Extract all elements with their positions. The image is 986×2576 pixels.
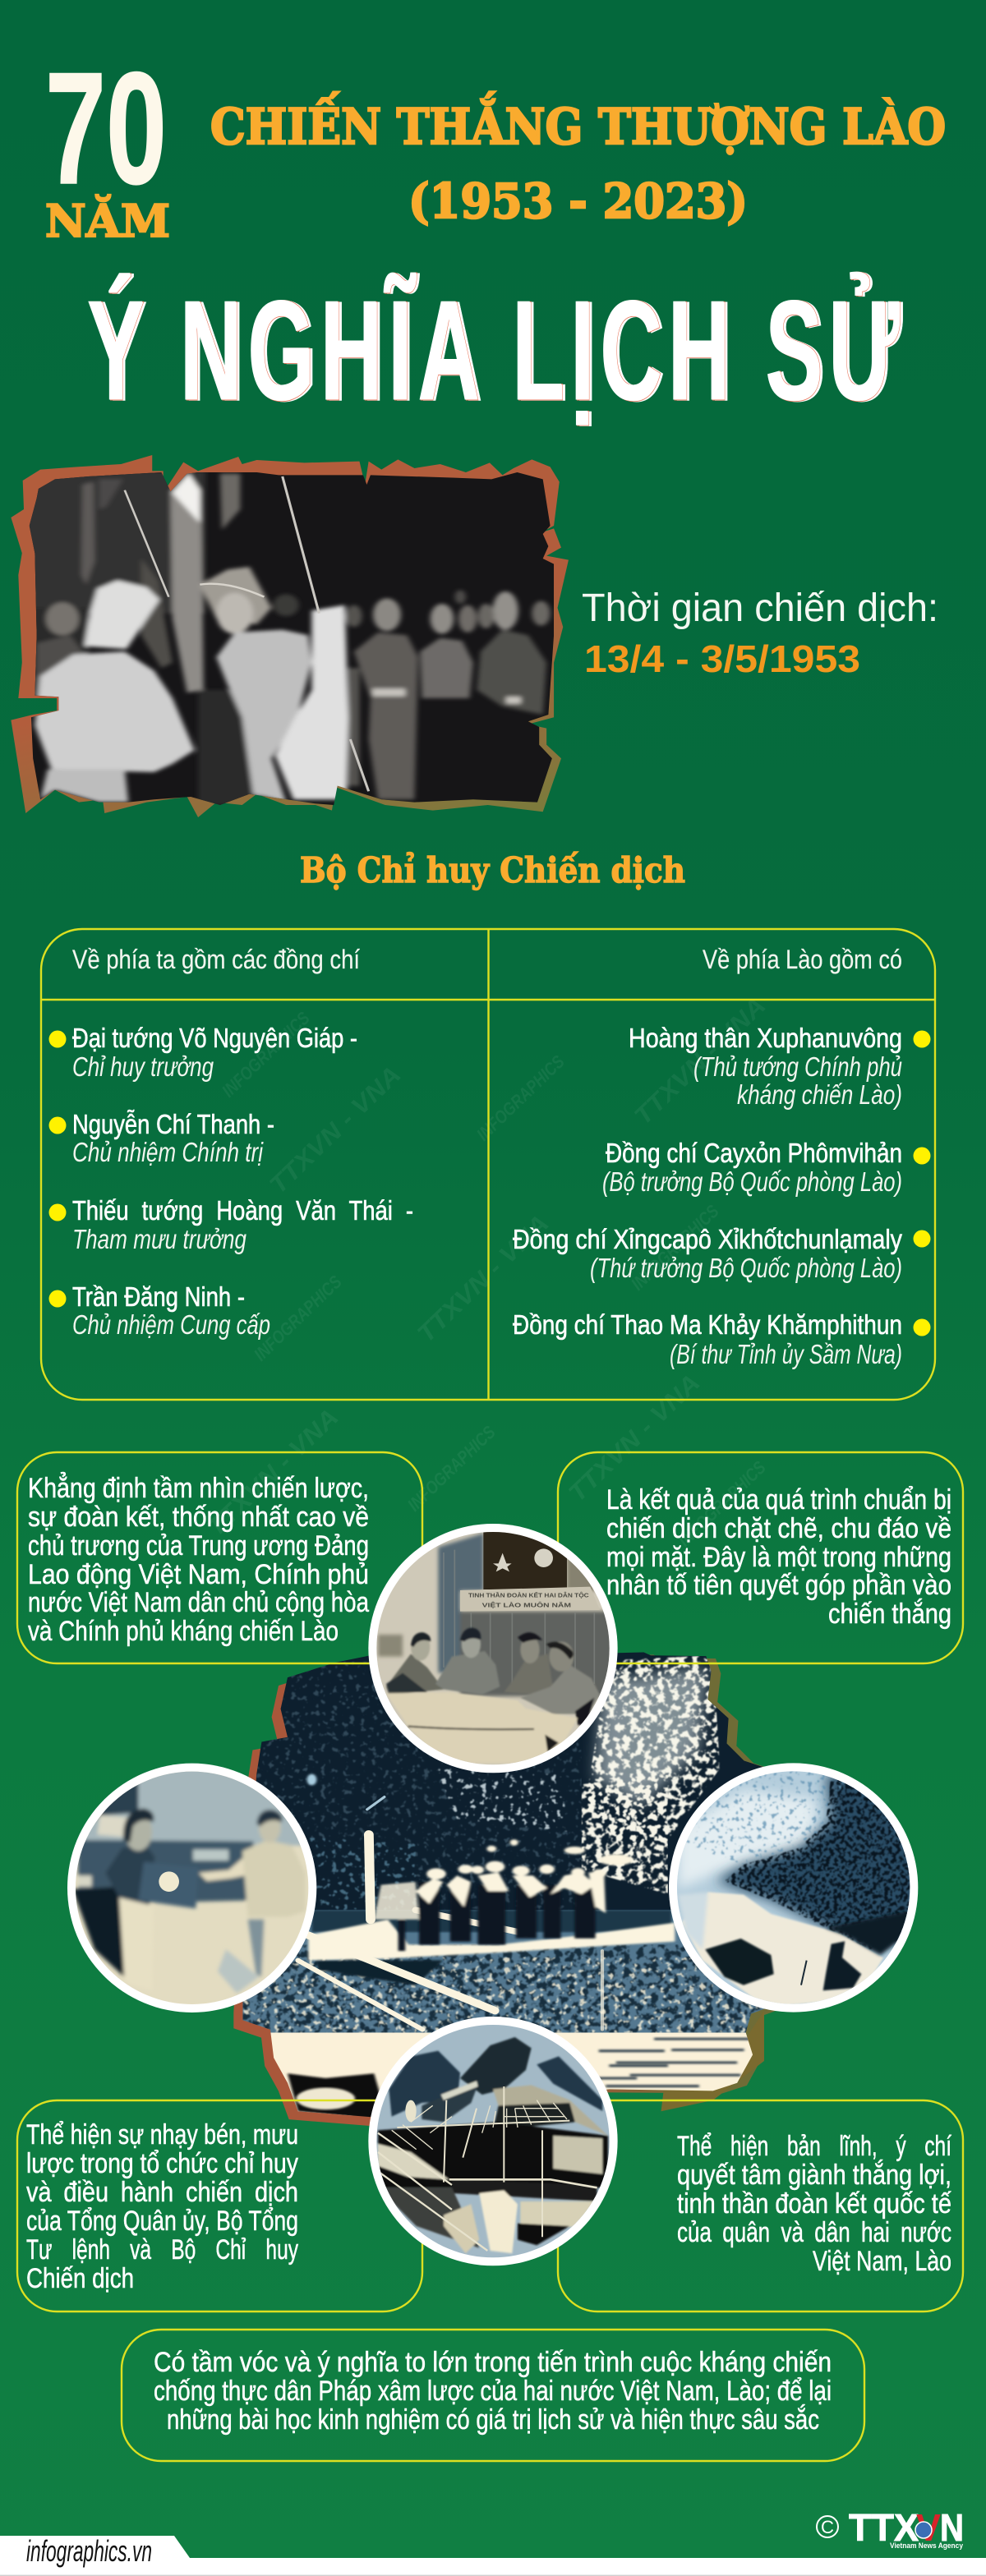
panel: text box top left: chủ trương của Trung ương Đảng: [28, 1530, 369, 1562]
watermarks: TTXVN - VNA: [564, 1369, 705, 1507]
panel: text box bottom left: lược trong tổ chức chỉ huy: [26, 2148, 298, 2179]
column headers: [72, 945, 902, 974]
right column: Lao commanders: Đồng chí Cayxỏn Phômvihản: [606, 1138, 902, 1168]
photo: flag ceremony with torn frame: [11, 455, 569, 817]
title block: 70 năm: NĂM: [45, 194, 170, 247]
right column: Lao commanders: Hoàng thân Xuphanuvông: [629, 1023, 902, 1053]
circle photo: mountain river: [669, 1763, 919, 2012]
left column: Vietnamese commanders: Chủ nhiệm Chính trị: [72, 1137, 264, 1167]
logo: TTXVN: TTX: [849, 2506, 919, 2549]
logo: TTXVN: Vietnam News Agency: [890, 2542, 964, 2551]
left column: Vietnamese commanders: Nguyễn Chí Thanh -: [72, 1109, 274, 1139]
right column: Lao commanders: Đồng chí Thao Ma Khảy Khămphithun: [513, 1309, 902, 1340]
photo: soldiers crossing (central): [222, 1643, 778, 2126]
watermarks: INFOGRAPHICS: [472, 1051, 569, 1145]
left column: Vietnamese commanders: Chỉ huy trưởng: [72, 1051, 214, 1082]
panel: command table: [41, 929, 935, 1400]
logo: TTXVN: C: [821, 2517, 834, 2537]
column headers: Về phía ta gồm các đồng chí: [72, 945, 360, 974]
panel: text box bottom centre: Có tầm vóc và ý nghĩa to lớn trong tiến trình cuộc kháng chiến: [154, 2347, 832, 2378]
panel: text box top right: chiến thắng: [828, 1598, 951, 1630]
left column: Vietnamese commanders: Trần Đăng Ninh -: [72, 1281, 245, 1312]
left column: Vietnamese commanders: Chủ nhiệm Cung cấp: [72, 1309, 270, 1340]
watermarks: INFOGRAPHICS: [403, 1422, 500, 1516]
panel: text box top right: [558, 1452, 963, 1663]
title block: 70 năm: 70: [45, 39, 167, 218]
panel: text box bottom right: [558, 2100, 963, 2312]
campaign time: 13/4 - 3/5/1953: [584, 637, 860, 680]
watermarks: INFOGRAPHICS: [674, 1457, 770, 1551]
right column: Lao commanders: kháng chiến Lào): [737, 1079, 902, 1110]
watermarks: [202, 992, 771, 1551]
circle photo: two officers holding the flag: [67, 1764, 316, 2012]
panel: text box top left: sự đoàn kết, thống nhất cao về: [28, 1502, 369, 1533]
logo: TTXVN: N: [940, 2506, 964, 2549]
panel: text box bottom centre: [122, 2330, 864, 2461]
right column: Lao commanders: Đồng chí Xỉngcapô Xỉkhốtchunlạmaly: [513, 1224, 902, 1254]
right column: Lao commanders: (Thứ trưởng Bộ Quốc phòng Lào): [590, 1253, 902, 1283]
left column: Vietnamese commanders: Tham mưu trưởng: [72, 1224, 247, 1254]
watermarks: TTXVN - VNA: [265, 1061, 406, 1199]
panel: text box bottom left: Chiến dịch: [26, 2263, 134, 2294]
logo: TTXVN: [817, 2506, 964, 2551]
panel: text box top left: Lao động Việt Nam, Chính phủ: [28, 1559, 369, 1590]
watermarks: INFOGRAPHICS: [218, 1008, 314, 1102]
heading: Chiến thắng Thượng Lào: (1953 - 2023): [408, 173, 748, 229]
panel: text box bottom left: Thể hiện sự nhạy bén, mưu: [26, 2119, 298, 2150]
watermarks: INFOGRAPHICS: [250, 1272, 346, 1365]
crowd bodies: [399, 1882, 596, 1951]
right column: Lao commanders: (Bí thư Tỉnh ủy Sầm Nưa): [670, 1339, 902, 1369]
circle photo: meeting around the map: VIỆT LÀO MUÔN NĂM: [482, 1601, 571, 1608]
campaign time: [582, 586, 938, 680]
panel: text box bottom left: [17, 2100, 422, 2312]
watermarks: INFOGRAPHICS: [627, 1201, 723, 1295]
site name: infographics.vn: [26, 2534, 152, 2568]
watermarks: TTXVN - VNA: [629, 992, 771, 1130]
panel: text box top left: và Chính phủ kháng chiến Lào: [28, 1616, 339, 1647]
panel: text box top left: Khẳng định tầm nhìn chiến lược,: [28, 1473, 369, 1504]
circle photo: meeting around the map: [368, 1524, 618, 1773]
panel: text box bottom left: Tư lệnh và Bộ Chỉ huy: [26, 2234, 298, 2266]
watermarks: TTXVN - VNA: [202, 1404, 343, 1542]
left column: Vietnamese commanders: Thiếu tướng Hoàng Văn Thái -: [72, 1195, 413, 1226]
panel: text box bottom left: và điều hành chiến dịch: [26, 2177, 298, 2208]
heading: campaign command: Bộ Chỉ huy Chiến dịch: [300, 850, 685, 890]
heading: Chiến thắng Thượng Lào: [210, 91, 946, 229]
panel: text box bottom centre: những bài học kinh nghiệm có giá trị lịch sử và hiện thực sâu sắc: [167, 2404, 819, 2436]
right column: Lao commanders: (Bộ trưởng Bộ Quốc phòng Lào): [602, 1166, 902, 1197]
circle photo: meeting around the map: TINH THẦN ĐOÀN KẾT HAI DÂN TỘC: [468, 1590, 589, 1598]
panel: text box bottom right: Việt Nam, Lào: [813, 2246, 951, 2277]
footer strip: [0, 2534, 986, 2576]
left column: Vietnamese commanders: [49, 1023, 413, 1340]
title block: 70 năm: [45, 39, 170, 247]
circle photo: building a stilt house: [368, 2017, 618, 2267]
column headers: Về phía Lào gồm có: [703, 945, 902, 974]
right column: Lao commanders: [513, 1023, 930, 1369]
campaign time: Thời gian chiến dịch:: [582, 586, 938, 630]
watermarks: TTXVN - VNA: [412, 1210, 554, 1348]
right column: Lao commanders: (Thủ tướng Chính phủ: [693, 1051, 902, 1082]
logo: TTXVN: V: [916, 2506, 941, 2549]
left column: Vietnamese commanders: Đại tướng Võ Nguyên Giáp -: [72, 1023, 357, 1053]
panel: text box top left: nước Việt Nam dân chủ cộng hòa: [28, 1587, 369, 1618]
panel: text box top left: [17, 1452, 422, 1663]
panel: text box bottom left: của Tổng Quân ủy, Bộ Tổng: [26, 2206, 298, 2237]
panel: text box bottom centre: chống thực dân Pháp xâm lược của hai nước Việt Nam, Lào; để lại: [154, 2376, 832, 2407]
